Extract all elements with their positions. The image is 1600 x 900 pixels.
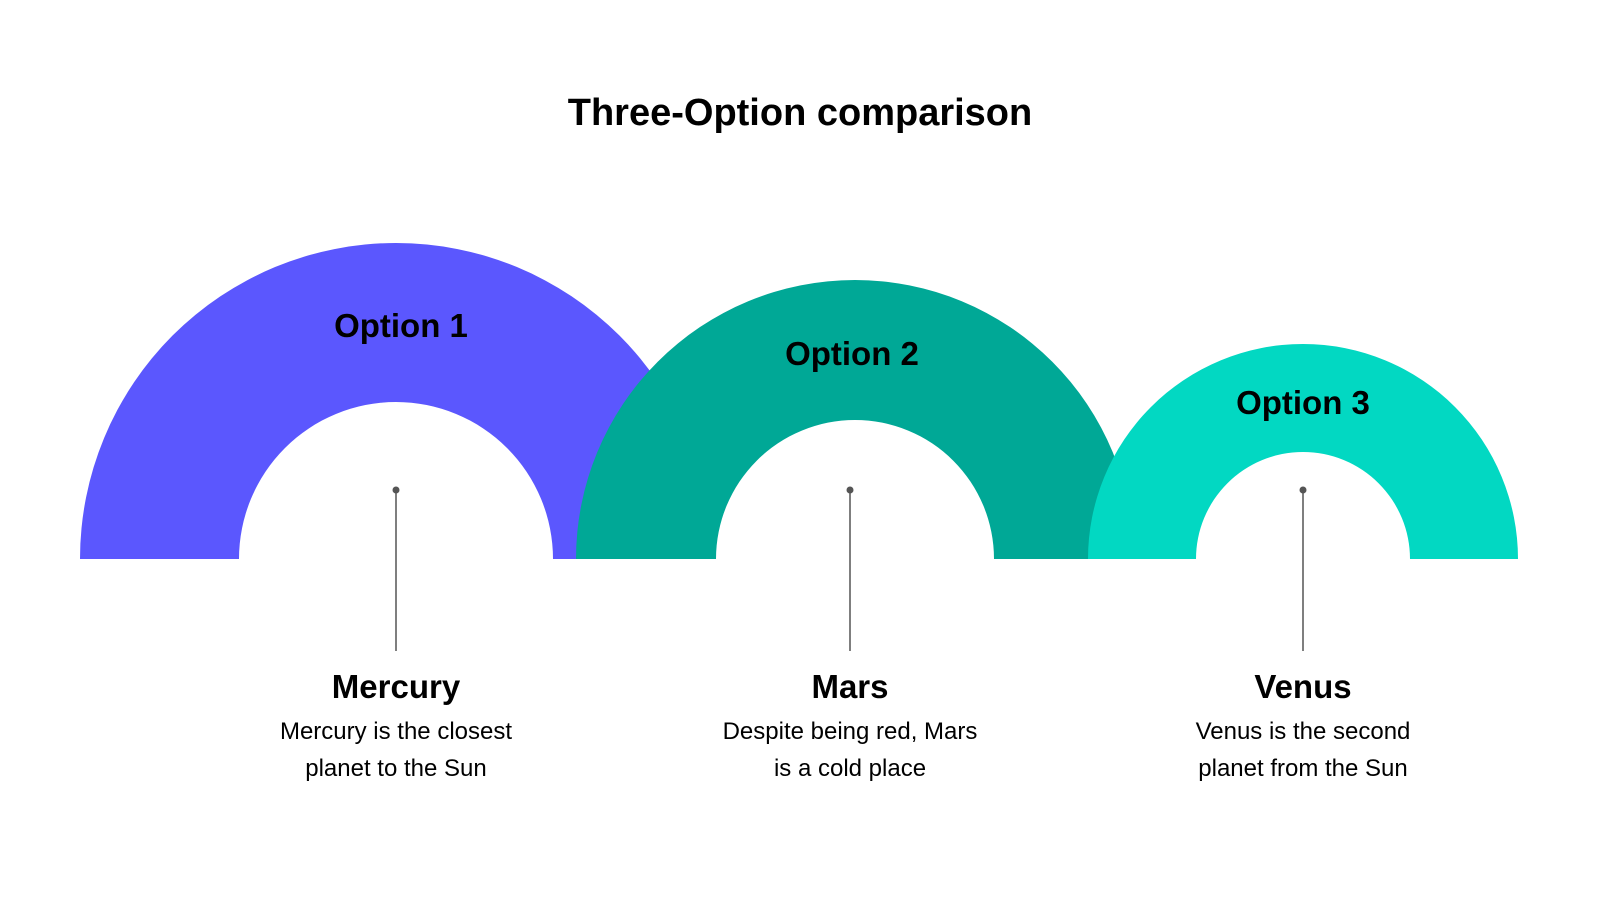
text block: Mercury: Mercury bbox=[332, 668, 460, 705]
text block: Venus: planet from the Sun bbox=[1198, 755, 1408, 782]
arc: option 1: Option 1 bbox=[334, 307, 468, 344]
text block: Mars: Mars bbox=[811, 668, 889, 705]
text block: Venus bbox=[1196, 668, 1410, 782]
arc: option 3 bbox=[1088, 344, 1518, 559]
text block: Mars bbox=[723, 668, 977, 782]
text block: Mercury: planet to the Sun bbox=[305, 755, 487, 782]
text block: Mars: Despite being red, Mars bbox=[723, 718, 977, 745]
text block: Venus: Venus is the second bbox=[1196, 718, 1410, 745]
text block: Mars: is a cold place bbox=[774, 755, 926, 782]
text block: Venus: Venus bbox=[1254, 668, 1352, 705]
arc: option 2: Option 2 bbox=[785, 335, 919, 372]
arc: option 1 bbox=[80, 243, 712, 559]
connector 3 bbox=[1300, 486, 1306, 651]
arc: option 2 bbox=[576, 280, 1134, 559]
title: Three-Option comparison bbox=[568, 92, 1032, 134]
connector 1 bbox=[392, 486, 400, 651]
connector 2 bbox=[846, 486, 854, 651]
text block: Mercury: Mercury is the closest bbox=[280, 718, 512, 745]
arc: option 3: Option 3 bbox=[1236, 384, 1370, 421]
text block: Mercury bbox=[280, 668, 512, 782]
